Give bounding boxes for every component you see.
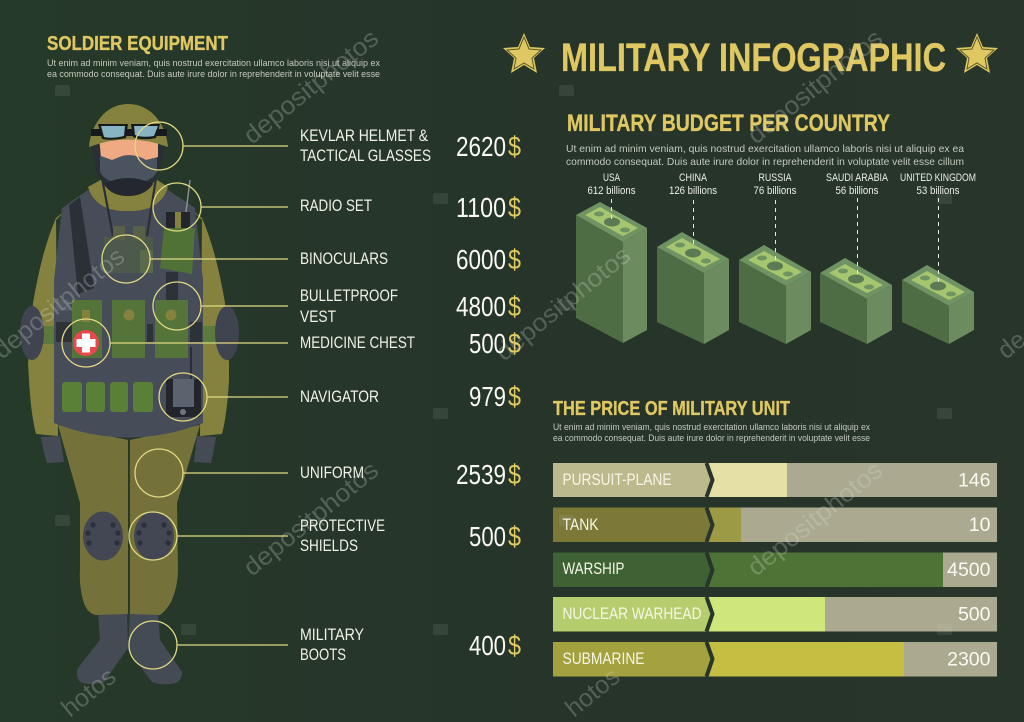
price: radio: 1100 — [456, 192, 506, 223]
country labels — [588, 172, 976, 197]
price: vest: $ — [508, 291, 521, 322]
label: shields: PROTECTIVE — [300, 517, 385, 535]
heading: unit price: THE PRICE OF MILITARY UNIT — [553, 398, 790, 420]
label: uniform: UNIFORM — [300, 464, 364, 482]
price: navigator: $ — [508, 381, 521, 412]
main title: MILITARY INFOGRAPHIC — [561, 36, 946, 80]
illustration: soldier — [20, 104, 239, 684]
text block: budget intro: commodo consequat. Duis aute irure dolor in reprehenderit in voluptate velit esse cillum — [566, 156, 964, 168]
head and hood — [92, 138, 165, 196]
label: vest: BULLETPROOF — [300, 287, 398, 305]
vest pouches — [56, 272, 202, 358]
icon: left star — [503, 33, 545, 73]
text block: budget intro — [566, 143, 964, 168]
price: helmet: $ — [508, 131, 521, 162]
gloves — [41, 436, 216, 463]
stack: China — [657, 232, 729, 344]
dashed leaders — [612, 198, 938, 282]
tactical vest — [54, 190, 203, 438]
country labels: SAUDI ARABIA — [826, 172, 889, 184]
camera watermark marks — [55, 85, 952, 635]
knee pads — [83, 512, 174, 560]
price: boots: $ — [508, 630, 521, 661]
label: boots — [300, 626, 364, 664]
price: boots: 400 — [469, 630, 506, 661]
price: medicine: 500 — [469, 328, 506, 359]
text block: unit intro: Ut enim ad minim veniam, quis nostrud exercitation ullamco laboris nisi ut aliquip ex — [553, 422, 870, 433]
stack: United Kingdom — [902, 265, 974, 344]
label: shields — [300, 517, 385, 555]
country labels: 56 billions — [836, 185, 879, 197]
country labels: UNITED KINGDOM — [900, 172, 976, 184]
watermarks: depositphotos — [742, 24, 888, 150]
price: binoculars: 6000 — [456, 244, 506, 275]
watermarks: depositphotos — [238, 24, 384, 150]
watermarks: depositphotos — [238, 456, 384, 582]
elbow pads — [20, 306, 239, 360]
callout rings and leader lines — [62, 122, 288, 669]
bar: warship: 4500 — [947, 559, 991, 581]
heading: soldier equipment: SOLDIER EQUIPMENT — [47, 33, 228, 55]
watermarks: depositphotos — [490, 241, 636, 367]
watermarks: hotos — [56, 662, 121, 722]
label: medicine: MEDICINE CHEST — [300, 334, 415, 352]
price: helmet: 2620 — [456, 131, 506, 162]
title row — [503, 33, 998, 80]
bar: pursuit-plane: 146 — [958, 470, 990, 492]
bar: warship: WARSHIP — [562, 560, 624, 578]
label: boots: BOOTS — [300, 646, 346, 664]
country labels: RUSSIA — [758, 172, 792, 184]
price: radio: $ — [508, 192, 521, 223]
icon: navigator device — [166, 347, 201, 417]
text block: unit intro: ea commodo consequat. Duis aute irure dolor in reprehenderit in voluptate velit esse — [553, 433, 870, 444]
boots — [77, 610, 182, 684]
shoulder strap — [69, 197, 94, 294]
country labels: CHINA — [679, 172, 708, 184]
text block: unit intro — [553, 422, 870, 444]
label: vest: VEST — [300, 308, 336, 326]
price: medicine: $ — [508, 328, 521, 359]
text block: soldier intro: Ut enim ad minim veniam, quis nostrud exercitation ullamco laboris nisi ut aliquip ex — [47, 58, 380, 69]
bar: submarine — [553, 642, 997, 676]
text block: budget intro: Ut enim ad minim veniam, quis nostrud exercitation ullamco laboris nisi ut aliquip ex ea — [566, 143, 964, 155]
label: shields: SHIELDS — [300, 537, 358, 555]
price: navigator: 979 — [469, 381, 506, 412]
label: helmet — [300, 127, 431, 165]
country labels: 53 billions — [916, 185, 960, 197]
price: uniform: 2539 — [456, 459, 506, 490]
price: vest: 4800 — [456, 291, 506, 322]
panel: military budget per country — [566, 110, 976, 344]
price: binoculars: $ — [508, 244, 521, 275]
country labels: 126 billions — [669, 185, 717, 197]
stack: USA — [576, 202, 647, 343]
radio set — [160, 180, 195, 274]
bar: nuclear warhead: 500 — [958, 604, 991, 626]
icon: medicine chest cross — [73, 330, 99, 356]
bar: warship — [553, 552, 997, 587]
price: uniform: $ — [508, 459, 521, 490]
stack: Russia — [739, 245, 811, 344]
helmet — [89, 104, 168, 147]
bar: nuclear warhead — [553, 597, 997, 632]
price: shields: 500 — [469, 521, 506, 552]
sleeves — [28, 210, 229, 436]
binocular straps and binoculars — [102, 178, 156, 273]
icon: right star — [956, 33, 998, 73]
label: vest — [300, 287, 398, 326]
bar: tank — [553, 508, 997, 542]
label: helmet: TACTICAL GLASSES — [300, 147, 431, 165]
label: helmet: KEVLAR HELMET & — [300, 127, 428, 145]
panel: equipment labels — [300, 127, 431, 664]
text block: soldier intro: ea commodo consequat. Duis aute irure dolor in reprehenderit in voluptate velit esse — [47, 69, 380, 80]
panel: equipment prices — [456, 131, 521, 661]
stack: Saudi Arabia — [820, 258, 892, 344]
heading: budget: MILITARY BUDGET PER COUNTRY — [567, 110, 890, 137]
panel: soldier equipment heading — [47, 33, 380, 80]
bar: tank: 10 — [969, 514, 991, 536]
label: boots: MILITARY — [300, 626, 364, 644]
price: shields: $ — [508, 521, 521, 552]
label: binoculars: BINOCULARS — [300, 250, 388, 268]
tactical glasses — [91, 124, 167, 140]
trousers — [58, 425, 200, 615]
panel: price of military unit — [553, 398, 997, 676]
bar: submarine: 2300 — [947, 648, 991, 670]
bar: tank: TANK — [562, 516, 598, 534]
label: radio: RADIO SET — [300, 197, 372, 215]
collar — [88, 178, 168, 211]
watermarks: hotos — [560, 662, 625, 722]
country labels: USA — [603, 172, 620, 184]
magazine pouches — [62, 382, 153, 412]
country labels: 612 billions — [588, 185, 636, 197]
bar: pursuit-plane — [553, 463, 997, 497]
text block: soldier intro — [47, 58, 380, 80]
bar: submarine: SUBMARINE — [562, 650, 644, 668]
country labels: 76 billions — [754, 185, 797, 197]
label: navigator: NAVIGATOR — [300, 388, 379, 406]
watermarks: depositphotos — [742, 456, 888, 582]
bar: nuclear warhead: NUCLEAR WARHEAD — [562, 605, 702, 623]
bar: pursuit-plane: PURSUIT-PLANE — [562, 471, 672, 489]
